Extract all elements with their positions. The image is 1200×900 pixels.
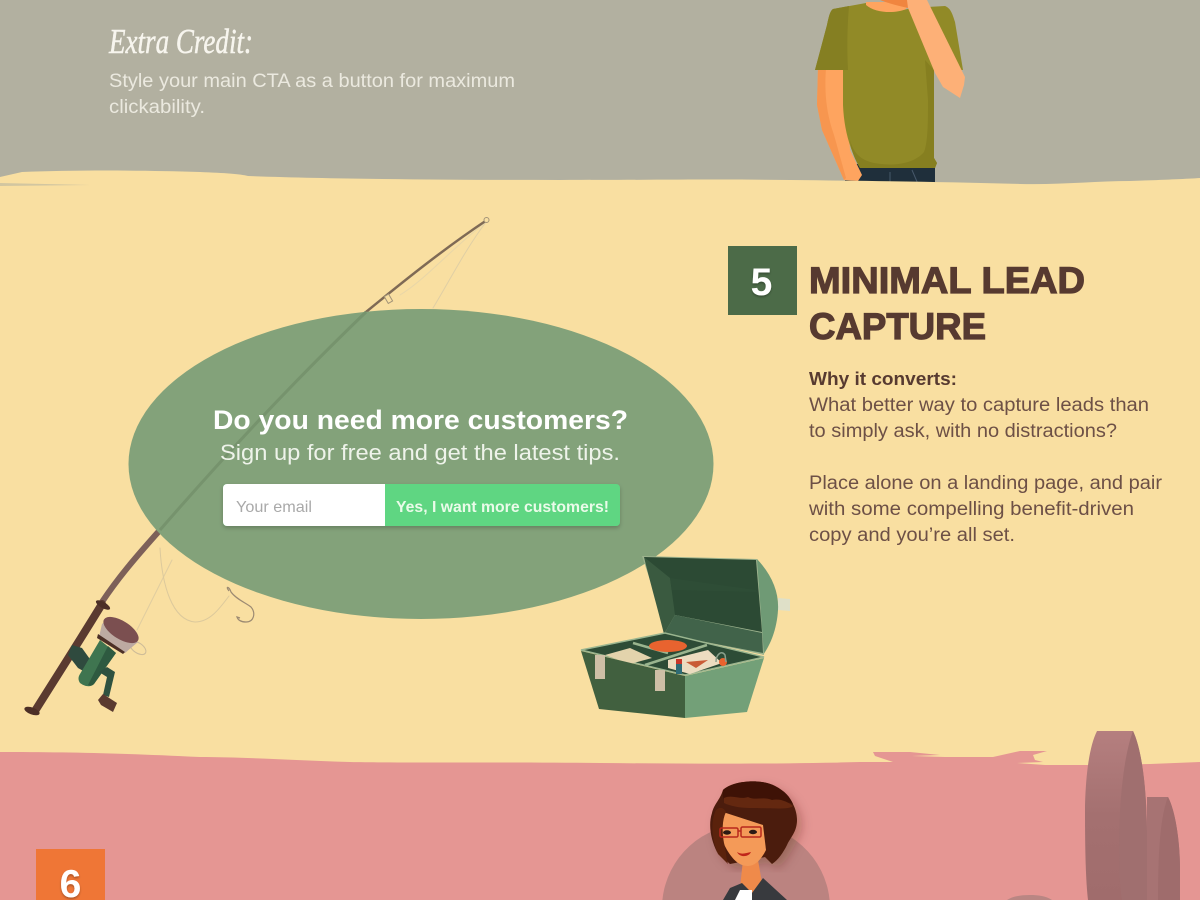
rod seen through oval — [160, 312, 366, 530]
illustration: tackle box — [581, 556, 790, 718]
illustration: fishing rod — [23, 218, 489, 717]
text: extra credit tip — [109, 71, 515, 118]
badge: section number 5: 5 — [751, 261, 772, 304]
text: why it converts — [808, 369, 1163, 546]
text: why it converts: What better way to capture leads than — [809, 395, 1149, 416]
form headline: Do you need more customers? — [213, 405, 628, 435]
email form — [223, 484, 620, 526]
heading: minimal lead capture — [809, 260, 1085, 347]
heading: minimal lead capture: CAPTURE — [809, 306, 986, 347]
panel: section 5 copy — [728, 246, 1163, 546]
badge: section number 5 — [728, 246, 797, 315]
illustration: man in green t-shirt — [815, 0, 965, 186]
email form: Yes, I want more customers! — [396, 499, 609, 516]
heading: extra credit: Extra Credit: — [108, 22, 253, 61]
text: extra credit tip: Style your main CTA as a button for maximum — [109, 71, 515, 92]
brush streak: top left — [0, 183, 90, 186]
panel: pink section — [0, 751, 1200, 900]
icon: section number 6 — [36, 849, 105, 900]
text: why it converts: Why it converts: — [809, 369, 957, 389]
reel — [68, 612, 148, 712]
text: why it converts: copy and you’re all set. — [809, 525, 1015, 546]
email form: Your email — [236, 499, 312, 516]
heading: minimal lead capture: MINIMAL LEAD — [809, 260, 1085, 301]
illustration: woman with glasses — [662, 781, 830, 900]
text: why it converts: with some compelling benefit-driven — [808, 499, 1134, 520]
panel: yellow section — [0, 170, 1200, 775]
illustration: stacked rolls — [1007, 731, 1180, 900]
text: why it converts: Place alone on a landing page, and pair — [809, 473, 1163, 494]
fish hook — [227, 587, 254, 622]
text: why it converts: to simply ask, with no distractions? — [809, 421, 1117, 442]
panel: oval signup form — [128, 309, 714, 619]
form subheadline: Sign up for free and get the latest tips. — [220, 440, 620, 465]
panel: grey section — [0, 0, 1200, 190]
text: extra credit tip: clickability. — [109, 97, 205, 118]
